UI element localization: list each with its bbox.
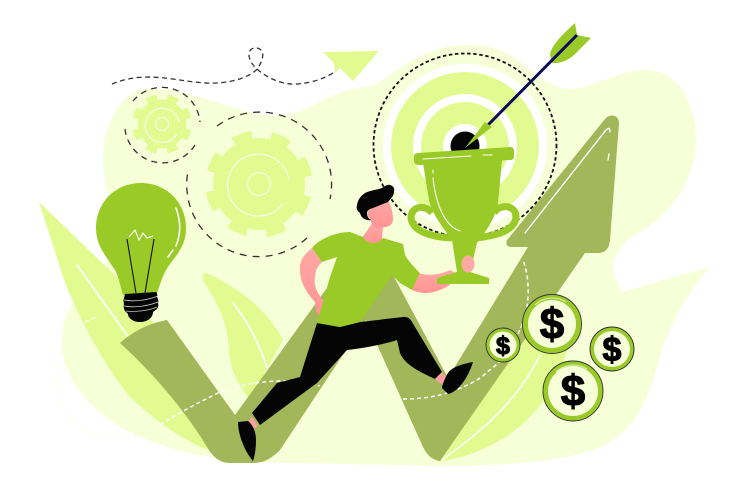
faint dashed loop <box>56 347 140 438</box>
bulb screw base <box>124 292 158 322</box>
arrow fletching <box>550 23 591 63</box>
shirt <box>312 232 420 327</box>
dashed flight path <box>112 48 333 84</box>
arrow head <box>465 122 492 148</box>
right leaf <box>438 320 567 462</box>
large gear <box>192 117 326 251</box>
arrow shaft <box>488 35 577 125</box>
right arm <box>412 270 462 293</box>
large gear dashed orbit <box>187 112 332 257</box>
back leg and trousers <box>252 317 442 425</box>
small gear <box>125 87 199 161</box>
big left leaf <box>39 202 215 452</box>
coin: medium top: $ <box>540 300 564 349</box>
arrow highlights <box>525 128 610 233</box>
coin: bottom: $ <box>561 367 585 416</box>
middle leaf <box>203 273 283 400</box>
left ankle <box>247 417 258 430</box>
coin: bottom <box>543 361 603 421</box>
trophy <box>411 147 516 284</box>
neck <box>362 222 383 244</box>
trophy handles <box>411 207 516 238</box>
target <box>374 54 556 236</box>
small gear dashed orbit <box>125 87 200 163</box>
hand holding trophy <box>462 256 474 272</box>
coin: right: $ <box>603 331 622 369</box>
hair <box>357 185 394 220</box>
left arm <box>300 248 329 317</box>
bulb filament <box>127 230 154 293</box>
coin: small: $ <box>496 332 510 360</box>
background blob <box>62 45 710 466</box>
left shoe <box>238 421 256 461</box>
white dashed path <box>85 260 528 425</box>
trophy highlights <box>423 155 492 231</box>
coin: right <box>590 327 634 371</box>
right shoe <box>442 362 473 394</box>
face <box>367 200 393 228</box>
growth arrow <box>120 116 619 463</box>
coin: medium top <box>522 294 582 354</box>
trophy cup <box>423 160 502 284</box>
light bulb <box>96 183 186 322</box>
right leaf vein <box>442 355 540 460</box>
coin: small <box>486 328 520 362</box>
trophy rim <box>414 147 514 165</box>
right ankle <box>435 372 449 385</box>
target arrow <box>465 23 591 148</box>
paper plane <box>323 51 379 81</box>
running man <box>238 185 473 461</box>
